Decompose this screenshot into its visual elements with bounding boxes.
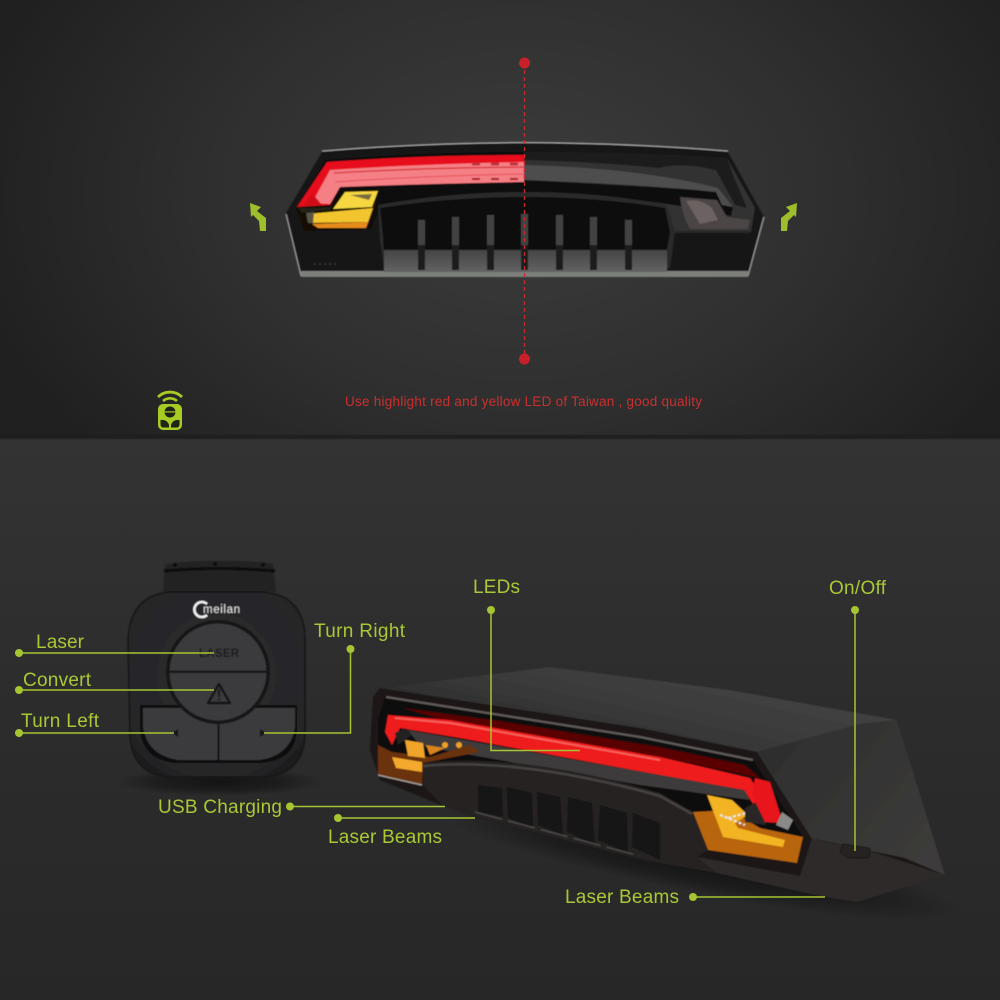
callout labels bbox=[21, 577, 887, 908]
button tray bbox=[140, 705, 297, 763]
left housing bbox=[296, 152, 524, 231]
leader lines and labels bbox=[19, 610, 855, 897]
top rim highlight bbox=[322, 142, 728, 151]
icon: right turn arrow bbox=[781, 203, 797, 231]
leader dots bbox=[15, 606, 859, 901]
clip bbox=[163, 561, 276, 592]
line: laser beams lower bbox=[693, 896, 825, 898]
callout labels: LEDs bbox=[473, 577, 520, 598]
silhouette bbox=[370, 667, 945, 902]
callout labels: Turn Right bbox=[314, 621, 406, 642]
icon: wireless remote bbox=[158, 392, 182, 430]
remote control: LASER bbox=[199, 648, 240, 660]
icon: left turn arrow bbox=[250, 203, 266, 231]
body bbox=[128, 592, 305, 777]
line: laser bbox=[19, 652, 214, 654]
panel: bottom background bbox=[0, 438, 1000, 1000]
grille bbox=[378, 192, 675, 272]
callout labels: Turn Left bbox=[21, 711, 100, 732]
round button bbox=[166, 620, 270, 724]
right amber lamp bbox=[693, 778, 803, 863]
red centre dashed axis bbox=[519, 58, 530, 364]
remote control bbox=[128, 561, 305, 777]
top face bbox=[380, 667, 897, 752]
line: turn right bbox=[264, 649, 350, 733]
amber lamp bbox=[297, 189, 380, 231]
callout labels: USB Charging bbox=[158, 797, 282, 818]
line: USB charging bbox=[290, 806, 445, 808]
callout labels: Laser Beams bbox=[328, 827, 442, 848]
lower rim highlight bbox=[286, 214, 764, 276]
shadow under remote bbox=[115, 768, 325, 796]
line: convert bbox=[19, 689, 214, 691]
line: laser beams upper bbox=[338, 817, 475, 819]
red LED strip bbox=[297, 155, 524, 207]
side face bbox=[757, 720, 945, 875]
callout labels: Convert bbox=[23, 670, 92, 691]
lower right facet bbox=[697, 839, 945, 902]
line: turn left bbox=[19, 732, 174, 734]
brand logo bbox=[194, 602, 240, 617]
tail light front view bbox=[286, 142, 764, 277]
dark red reflector bbox=[403, 708, 760, 778]
divider shadow bbox=[0, 435, 1000, 439]
shadow under tail light bbox=[434, 780, 966, 944]
icon: warning triangle bbox=[208, 684, 230, 703]
panel: top background bbox=[0, 0, 1000, 438]
line: LEDs bbox=[491, 610, 580, 750]
tail light perspective view bbox=[370, 667, 945, 902]
red LED bar bbox=[385, 715, 783, 823]
power button bbox=[840, 844, 870, 858]
callout labels: Laser bbox=[36, 632, 85, 653]
callout labels: Laser Beams bbox=[565, 887, 679, 908]
right unlit lens bbox=[524, 152, 755, 232]
lens strip bbox=[408, 730, 750, 800]
brand logo: meilan bbox=[203, 604, 240, 616]
grille body bbox=[423, 761, 717, 873]
upper rim bbox=[386, 697, 753, 760]
line: on/off bbox=[854, 610, 856, 851]
left button bbox=[143, 708, 218, 760]
body bbox=[286, 142, 764, 277]
small details bbox=[314, 263, 336, 265]
window interior bbox=[378, 697, 803, 863]
left amber lamp bbox=[378, 728, 480, 785]
button arrows bbox=[172, 729, 266, 737]
callout labels: On/Off bbox=[829, 578, 887, 599]
caption: Use highlight red and yellow LED of Taiwan , good quality bbox=[345, 394, 702, 409]
right button bbox=[220, 708, 295, 760]
